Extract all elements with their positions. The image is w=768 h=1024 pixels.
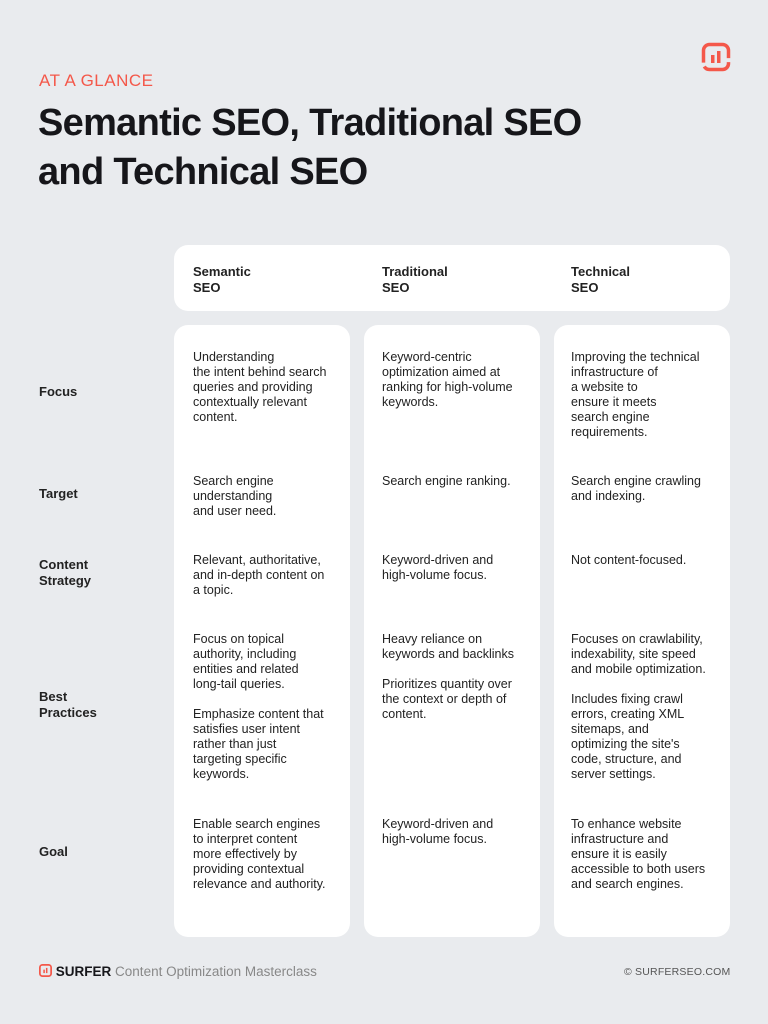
column: semantic: Search engine [193, 474, 274, 488]
column: technical: Not content-focused. [571, 553, 686, 567]
column: traditional: high-volume focus. [382, 832, 487, 846]
column: semantic: keywords. [193, 767, 249, 781]
header card [174, 245, 730, 311]
column: semantic: satisfies user intent [193, 722, 300, 736]
column: semantic: Emphasize content that [193, 707, 324, 721]
column: semantic: contextually relevant [193, 395, 307, 409]
column: technical: errors, creating XML [571, 707, 684, 721]
footer url: © SURFERSEO.COM [624, 966, 730, 978]
column: traditional: the context or depth of [382, 692, 506, 706]
column: traditional: ranking for high-volume [382, 380, 513, 394]
title: and Technical SEO [38, 151, 368, 193]
column: traditional: Keyword-driven and [382, 817, 493, 831]
text: Practices [39, 705, 97, 720]
column: technical: infrastructure of [571, 365, 658, 379]
column: technical: requirements. [571, 425, 647, 439]
column: technical: Improving the technical [571, 350, 700, 364]
text: Strategy [39, 573, 91, 588]
column: traditional: keywords. [382, 395, 438, 409]
column: semantic: the intent behind search [193, 365, 326, 379]
column: traditional: Keyword-centric [382, 350, 472, 364]
logo icon top right [702, 42, 730, 72]
header card: SEO [571, 280, 598, 295]
header card: Semantic [193, 264, 251, 279]
column: traditional: Search engine ranking. [382, 474, 511, 488]
column: technical: sitemaps, and [571, 722, 649, 736]
column: technical: accessible to both users [571, 862, 705, 876]
column: semantic: relevance and authority. [193, 877, 326, 891]
column: semantic: targeting specific [193, 752, 287, 766]
column: traditional [364, 325, 540, 937]
footer brand: SURFER Content Optimization Masterclass [56, 964, 317, 979]
column: technical: Includes fixing crawl [571, 692, 683, 706]
column: semantic: queries and providing [193, 380, 313, 394]
column: semantic: Understanding [193, 350, 274, 364]
column: technical: code, structure, and [571, 752, 681, 766]
column: semantic: authority, including [193, 647, 296, 661]
column: technical: and mobile optimization. [571, 662, 706, 676]
eyebrow: AT A GLANCE [39, 71, 153, 90]
header card: SEO [382, 280, 409, 295]
column: traditional: Prioritizes quantity over [382, 677, 512, 691]
column: semantic: Enable search engines [193, 817, 320, 831]
column: traditional: high-volume focus. [382, 568, 487, 582]
column: semantic: providing contextual [193, 862, 304, 876]
column: traditional: Heavy reliance on [382, 632, 482, 646]
column: traditional: optimization aimed at [382, 365, 500, 379]
text: Goal [39, 844, 68, 859]
column: technical: ensure it meets [571, 395, 656, 409]
column: semantic: more effectively by [193, 847, 297, 861]
column: technical: and search engines. [571, 877, 684, 891]
header card: Technical [571, 264, 630, 279]
column: semantic: Relevant, authoritative, [193, 553, 321, 567]
column: semantic: entities and related [193, 662, 299, 676]
row labels: Focus [39, 384, 77, 399]
column: technical: Focuses on crawlability, [571, 632, 703, 646]
column: traditional: Keyword-driven and [382, 553, 493, 567]
text: Target [39, 486, 78, 501]
column: technical: To enhance website [571, 817, 682, 831]
column: semantic: and user need. [193, 504, 276, 518]
column: semantic: to interpret content [193, 832, 297, 846]
column: semantic: understanding [193, 489, 272, 503]
column: technical: infrastructure and [571, 832, 668, 846]
column: semantic [174, 325, 350, 937]
column: semantic: Focus on topical [193, 632, 284, 646]
column: technical: and indexing. [571, 489, 645, 503]
column: semantic: and in-depth content on [193, 568, 324, 582]
column: technical [554, 325, 730, 937]
column: technical: ensure it is easily [571, 847, 667, 861]
header card: SEO [193, 280, 220, 295]
column: traditional: content. [382, 707, 426, 721]
column: technical: optimizing the site's [571, 737, 680, 751]
column: semantic: a topic. [193, 583, 233, 597]
column: technical: server settings. [571, 767, 656, 781]
column: semantic: content. [193, 410, 237, 424]
column: technical: indexability, site speed [571, 647, 696, 661]
column: technical: Search engine crawling [571, 474, 701, 488]
column: technical: search engine [571, 410, 650, 424]
title: Semantic SEO, Traditional SEO [38, 102, 582, 144]
text: Content [39, 557, 88, 572]
column: semantic: rather than just [193, 737, 276, 751]
text: Best [39, 689, 67, 704]
title [38, 102, 582, 193]
column: technical: a website to [571, 380, 638, 394]
column: traditional: keywords and backlinks [382, 647, 514, 661]
header card: Traditional [382, 264, 448, 279]
column: semantic: long-tail queries. [193, 677, 285, 691]
